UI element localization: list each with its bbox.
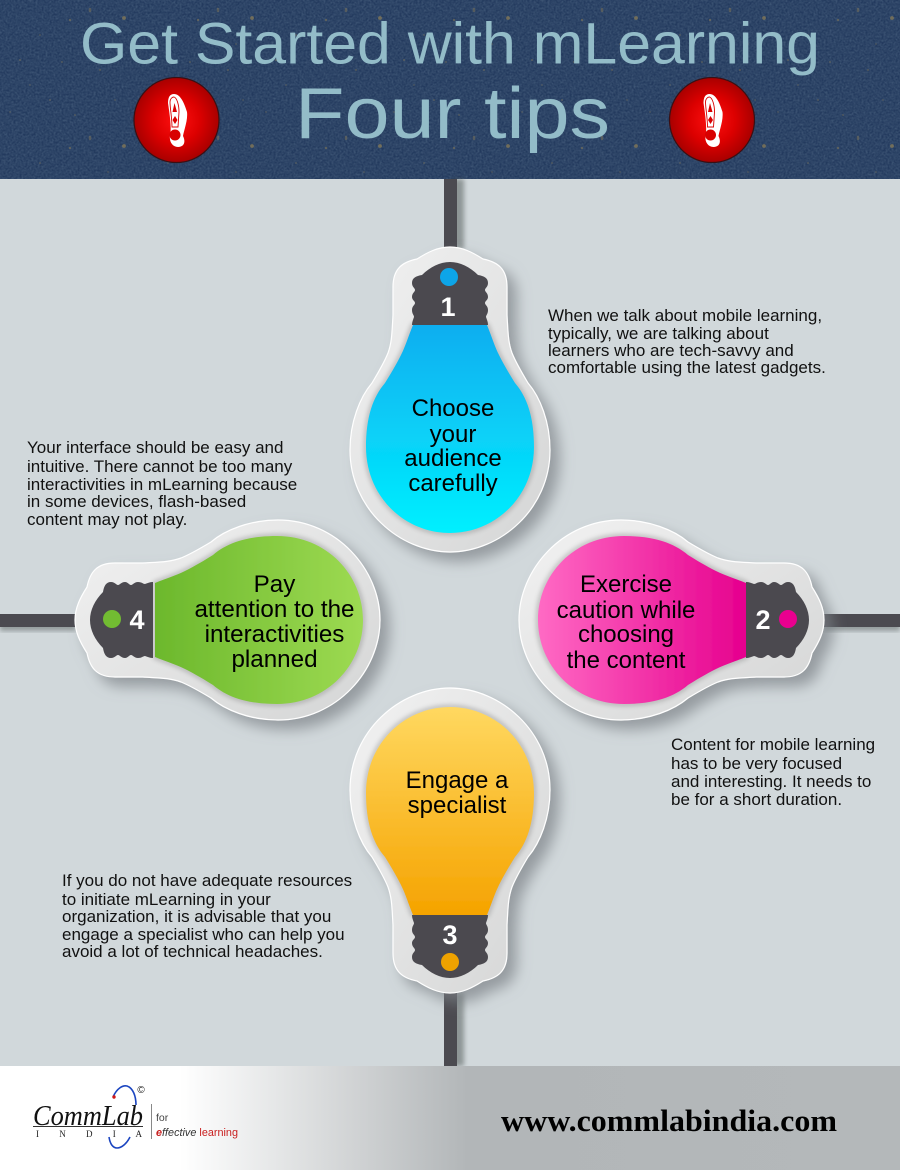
bulb 4 heading: [194, 571, 355, 673]
bulb 2 heading: [557, 571, 695, 674]
tip 3 description: [62, 871, 352, 961]
tip 2 description: and interesting. It needs to: [671, 772, 871, 791]
bulb 1 heading: Choose: [412, 395, 494, 422]
bulb 1: choose audience: 1: [440, 292, 456, 322]
tip 3 description: engage a specialist who can help you: [62, 925, 345, 944]
connector rods: [0, 179, 900, 1066]
title: Four tips: [295, 74, 610, 154]
title: [80, 12, 820, 154]
bulb 1 heading: carefully: [408, 470, 498, 497]
bulb 4 heading: Pay: [254, 571, 296, 598]
bulb 3 heading: specialist: [408, 792, 507, 819]
bulb 2 heading: caution while: [557, 597, 695, 624]
logo: I N D I A: [36, 1129, 142, 1139]
tip 4 description: in some devices, flash-based: [27, 492, 246, 511]
logo: effective learning: [156, 1127, 238, 1139]
tip 1 description: comfortable using the latest gadgets.: [548, 358, 826, 377]
logo: [33, 1085, 238, 1148]
bulb 2 heading: the content: [567, 647, 686, 674]
bulb 4 heading: attention to the: [194, 596, 355, 623]
bulb 4: interactivities: [75, 520, 380, 720]
bulb 3: engage specialist: [350, 688, 550, 993]
tip 4 description: intuitive. There cannot be too many: [27, 457, 293, 476]
bulb 1 heading: audience: [404, 445, 502, 472]
tip 1 description: [548, 306, 826, 377]
icon: right warning badge: [670, 78, 754, 162]
tip 3 description: avoid a lot of technical headaches.: [62, 942, 323, 961]
logo: ©: [137, 1085, 145, 1096]
tip 4 description: content may not play.: [27, 510, 187, 529]
bulb 4 heading: interactivities: [205, 621, 344, 648]
bulb 1: choose audience: [350, 247, 550, 552]
bulb 3 heading: Engage a: [406, 767, 509, 794]
title: Get Started with mLearning: [80, 12, 820, 76]
bulb 4: interactivities: 4: [129, 605, 145, 635]
bulb 2: exercise caution: [519, 520, 824, 720]
bulb 1 heading: your: [430, 421, 476, 448]
tip 3 description: organization, it is advisable that you: [62, 907, 331, 926]
bulb 3 heading: [406, 767, 509, 819]
tip 2 description: [671, 735, 875, 809]
tip 1 description: typically, we are talking about: [548, 324, 769, 343]
tip 3 description: If you do not have adequate resources: [62, 871, 352, 890]
bulb 2 heading: choosing: [578, 621, 674, 648]
bulb 1 heading: [404, 395, 502, 497]
tip 1 description: When we talk about mobile learning,: [548, 306, 822, 325]
tip 4 description: [27, 438, 297, 529]
bulb 3: engage specialist: 3: [442, 920, 458, 950]
tip 4 description: Your interface should be easy and: [27, 438, 283, 457]
tip 1 description: learners who are tech-savvy and: [548, 341, 794, 360]
bulb 2: exercise caution: 2: [755, 605, 771, 635]
footer band: [0, 1066, 900, 1170]
tip 2 description: has to be very focused: [671, 754, 842, 773]
tip 3 description: to initiate mLearning in your: [62, 890, 271, 909]
icon: left warning badge: [134, 78, 219, 162]
header banner: [0, 0, 900, 179]
website url: www.commlabindia.com: [501, 1103, 837, 1138]
tip 2 description: be for a short duration.: [671, 790, 842, 809]
tip 4 description: interactivities in mLearning because: [27, 475, 297, 494]
bulb 4 heading: planned: [231, 646, 318, 673]
logo: for: [156, 1112, 169, 1124]
logo: CommLab: [33, 1100, 143, 1132]
tip 2 description: Content for mobile learning: [671, 735, 875, 754]
bulb 2 heading: Exercise: [580, 571, 672, 598]
